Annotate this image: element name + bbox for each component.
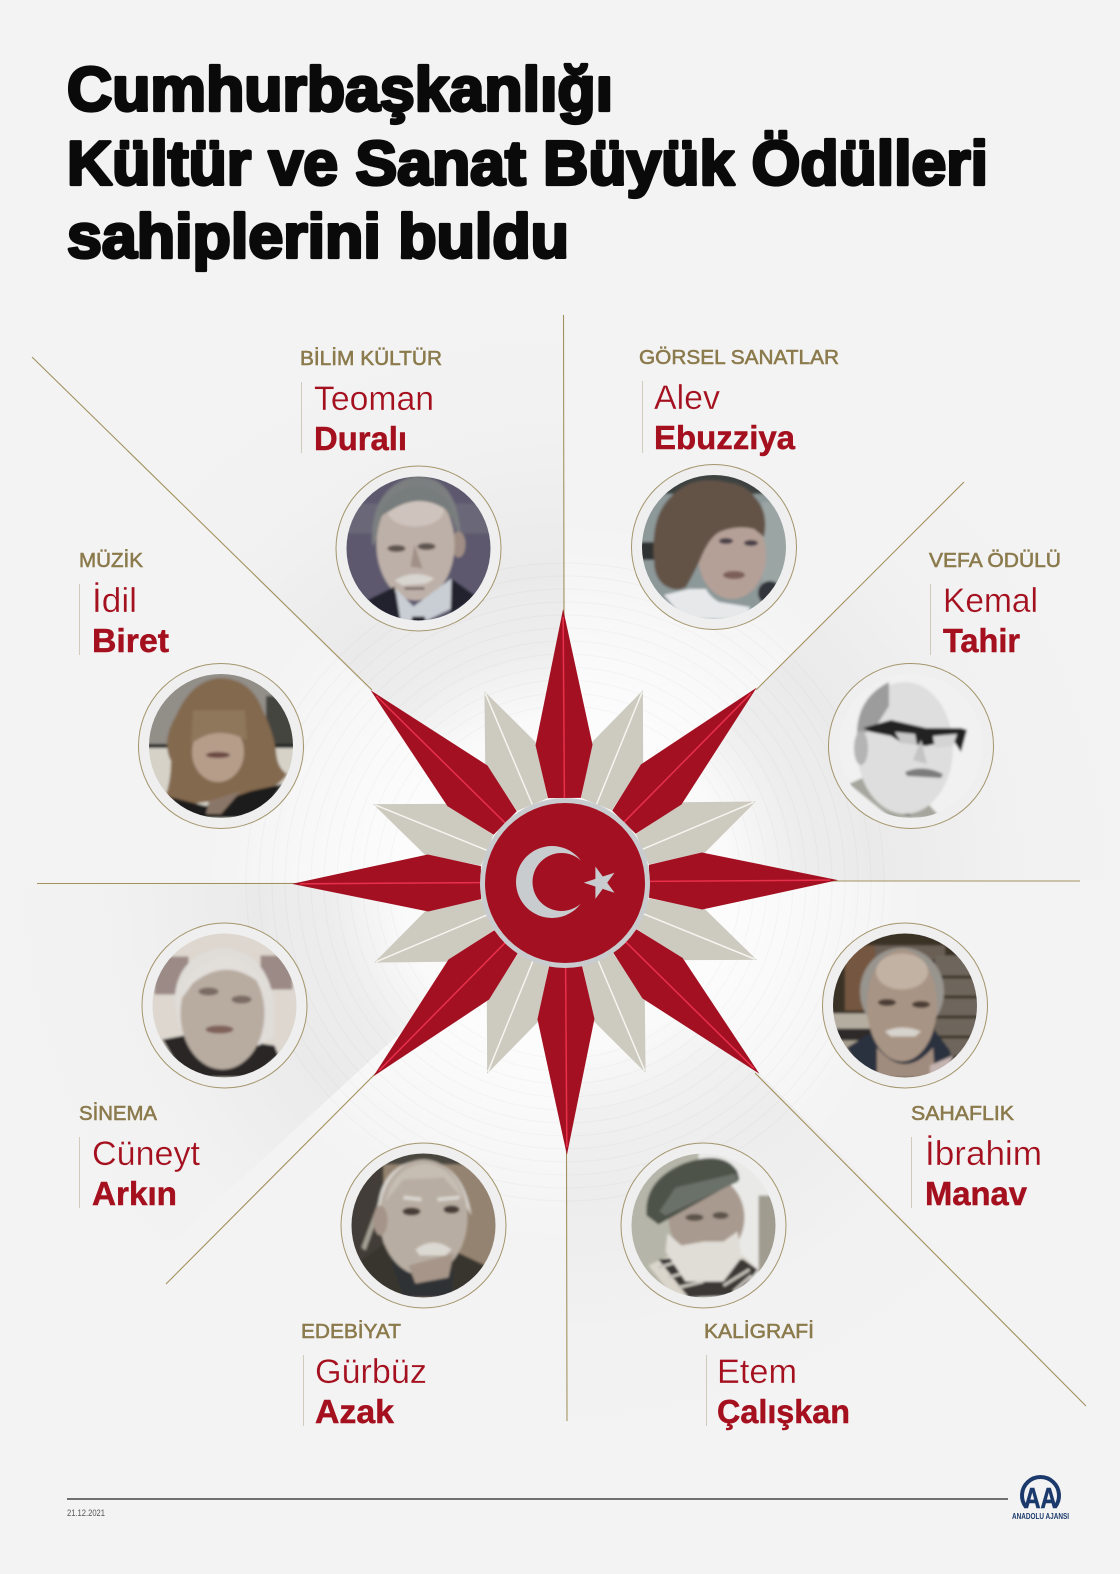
name: Tahir [943, 622, 1020, 659]
portrait: İbrahim Manav [822, 923, 988, 1088]
panel: Müzik [79, 549, 304, 828]
name: Ebuzziya [654, 419, 796, 456]
category label: VEFA ÖDÜLÜ [929, 550, 1061, 572]
logo: Anadolu Ajansı: AA [1024, 1483, 1057, 1515]
portrait: Alev Ebuzziya [632, 464, 796, 630]
portrait: İdil Biret [138, 664, 304, 828]
category label: SİNEMA [79, 1102, 158, 1125]
name [925, 1135, 1042, 1212]
name: Manav [925, 1175, 1028, 1212]
name: Biret [92, 622, 169, 659]
name: Duralı [314, 420, 407, 457]
category label: EDEBİYAT [301, 1320, 401, 1343]
category label: BİLİM KÜLTÜR [300, 347, 442, 370]
portrait: Cüneyt Arkın [142, 923, 307, 1088]
category label: MÜZİK [79, 549, 144, 572]
name [315, 1353, 427, 1430]
portrait: Etem Çalışkan [621, 1143, 786, 1308]
title: Kültür ve Sanat Büyük Ödülleri [67, 130, 988, 198]
logo: Anadolu Ajansı [1012, 1477, 1069, 1521]
name [943, 582, 1038, 659]
panel: Görsel Sanatlar [632, 347, 839, 630]
name [92, 1135, 201, 1212]
name: Teoman [314, 380, 434, 418]
portrait: Gürbüz Azak [341, 1143, 506, 1308]
portrait: Kemal Tahir [828, 664, 994, 828]
category label: SAHAFLIK [911, 1103, 1015, 1125]
name: Çalışkan [717, 1393, 850, 1430]
name: Azak [315, 1393, 395, 1430]
title: sahiplerini buldu [67, 202, 569, 272]
portrait: Teoman Duralı [336, 466, 501, 631]
name: Cüneyt [92, 1135, 201, 1173]
panel: Sinema [79, 923, 307, 1212]
panel: Bilim Kültür [300, 347, 501, 631]
grey star petals [362, 679, 768, 1085]
flag medallion [480, 798, 650, 968]
panel: Edebiyat [301, 1143, 506, 1430]
category label: KALİGRAFİ [704, 1320, 814, 1343]
name: İdil [92, 582, 137, 620]
name [654, 379, 796, 456]
name: Kemal [943, 582, 1038, 620]
name [717, 1353, 850, 1430]
red star points [290, 607, 840, 1157]
logo: Anadolu Ajansı: ANADOLU AJANSI [1012, 1511, 1069, 1521]
panel: Kaligrafi [621, 1143, 850, 1430]
central star emblem [290, 607, 840, 1157]
name: Etem [717, 1353, 797, 1391]
title: Cumhurbaşkanlığı [67, 56, 613, 124]
name: Alev [654, 379, 720, 417]
name: Gürbüz [315, 1353, 427, 1391]
panel: Sahaflık [822, 923, 1042, 1212]
radiating gold divider lines [32, 315, 1086, 1421]
title [67, 56, 988, 272]
date: 21.12.2021 [67, 1508, 105, 1518]
name [92, 582, 169, 659]
name: Arkın [92, 1175, 177, 1212]
panel: Vefa Ödülü [828, 550, 1061, 828]
name: İbrahim [925, 1135, 1042, 1173]
category label: GÖRSEL SANATLAR [639, 347, 839, 369]
name [314, 380, 434, 457]
